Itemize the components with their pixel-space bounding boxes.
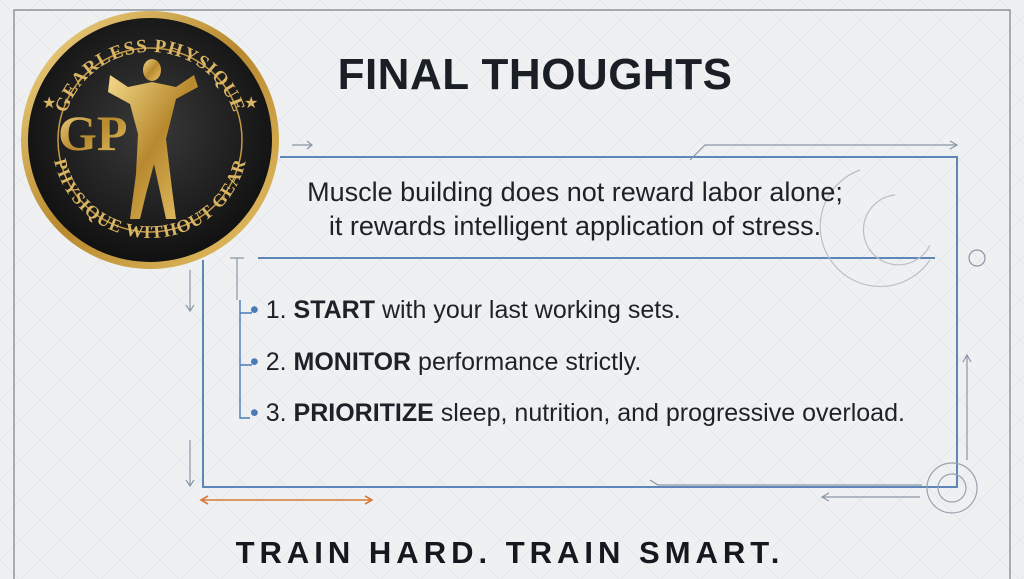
title: FINAL THOUGHTS xyxy=(338,50,732,99)
quote xyxy=(307,177,843,241)
logo xyxy=(21,11,279,269)
logo: GP xyxy=(58,105,127,161)
logo: ★ xyxy=(42,95,56,112)
logo: ★ xyxy=(244,95,258,112)
logo: GEARLESS PHYSIQUE xyxy=(56,40,245,112)
list connectors xyxy=(240,300,252,418)
item 2: • 2. MONITOR performance strictly. xyxy=(250,348,641,376)
blue frame xyxy=(203,157,957,487)
item 3: • 3. PRIORITIZE sleep, nutrition, and progressive overload. xyxy=(250,399,905,427)
quote: it rewards intelligent application of stress. xyxy=(329,211,821,241)
orange arrow xyxy=(201,496,372,504)
logo: PHYSIQUE WITHOUT GEAR xyxy=(54,158,246,238)
item 1: • 1. START with your last working sets. xyxy=(250,296,681,324)
quote: Muscle building does not reward labor alone; xyxy=(307,177,843,207)
footer tagline: TRAIN HARD. TRAIN SMART. xyxy=(236,535,784,570)
list xyxy=(250,296,905,427)
